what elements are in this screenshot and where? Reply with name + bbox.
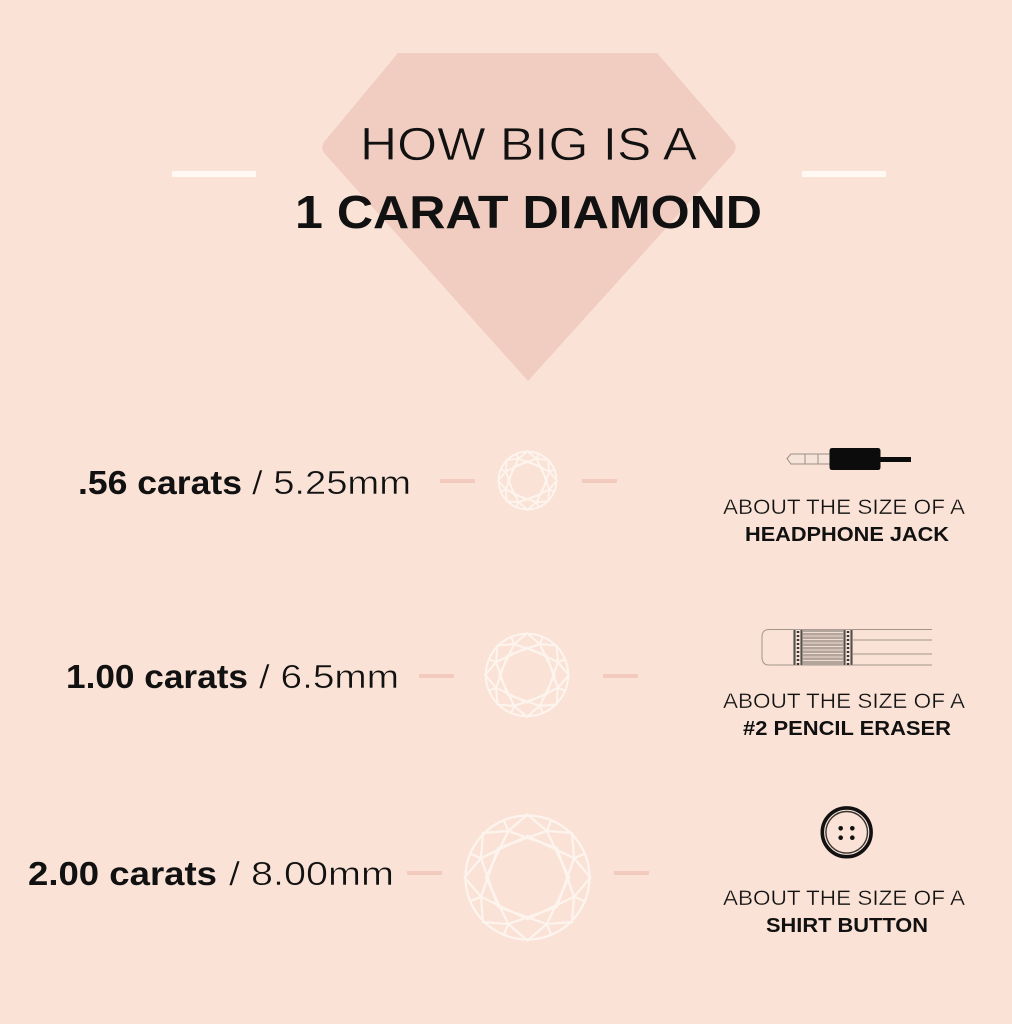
icon: shirt button — [822, 808, 871, 857]
right title bar — [802, 171, 886, 177]
comparison text: pencil eraser — [723, 690, 965, 740]
comparison text: headphone jack: ABOUT THE SIZE OF A — [723, 496, 965, 519]
icon: pencil eraser — [762, 630, 932, 665]
title line one: HOW BIG IS A — [360, 118, 697, 170]
dash right — [614, 871, 649, 875]
dash left — [440, 479, 475, 483]
icon: small diamond — [498, 451, 557, 510]
icon: large diamond — [465, 815, 590, 940]
comparison text: pencil eraser: #2 PENCIL ERASER — [743, 718, 952, 740]
diamond shape behind title — [322, 53, 736, 381]
dash right — [582, 479, 617, 483]
label: .56 carats / 5.25mm: / 5.25mm — [252, 465, 411, 502]
dash left — [407, 871, 442, 875]
label: 2.00 carats / 8.00mm: 2.00 carats — [28, 856, 217, 893]
comparison text: headphone jack — [723, 496, 965, 546]
row: 2.00 carats — [28, 808, 965, 940]
label: 2.00 carats / 8.00mm: / 8.00mm — [229, 856, 394, 893]
label: 1.00 carats / 6.5mm: / 6.5mm — [259, 659, 399, 696]
dash left — [419, 674, 454, 678]
row: .56 carats — [78, 448, 965, 546]
title — [295, 118, 762, 238]
dash right — [603, 674, 638, 678]
left title bar — [172, 171, 256, 177]
comparison text: shirt button: SHIRT BUTTON — [766, 915, 928, 937]
label: 2.00 carats / 8.00mm — [28, 856, 394, 893]
label: 1.00 carats / 6.5mm — [66, 659, 399, 696]
comparison text: headphone jack: HEADPHONE JACK — [745, 524, 950, 546]
icon: medium diamond — [485, 633, 569, 717]
comparison text: pencil eraser: ABOUT THE SIZE OF A — [723, 690, 965, 713]
label: .56 carats / 5.25mm: .56 carats — [78, 465, 242, 502]
comparison text: shirt button: ABOUT THE SIZE OF A — [723, 887, 965, 910]
icon: headphone jack — [787, 448, 911, 470]
label: 1.00 carats / 6.5mm: 1.00 carats — [66, 659, 248, 696]
row: 1.00 carats — [66, 630, 965, 740]
title line two: 1 CARAT DIAMOND — [295, 186, 762, 238]
comparison text: shirt button — [723, 887, 965, 937]
label: .56 carats / 5.25mm — [78, 465, 411, 502]
